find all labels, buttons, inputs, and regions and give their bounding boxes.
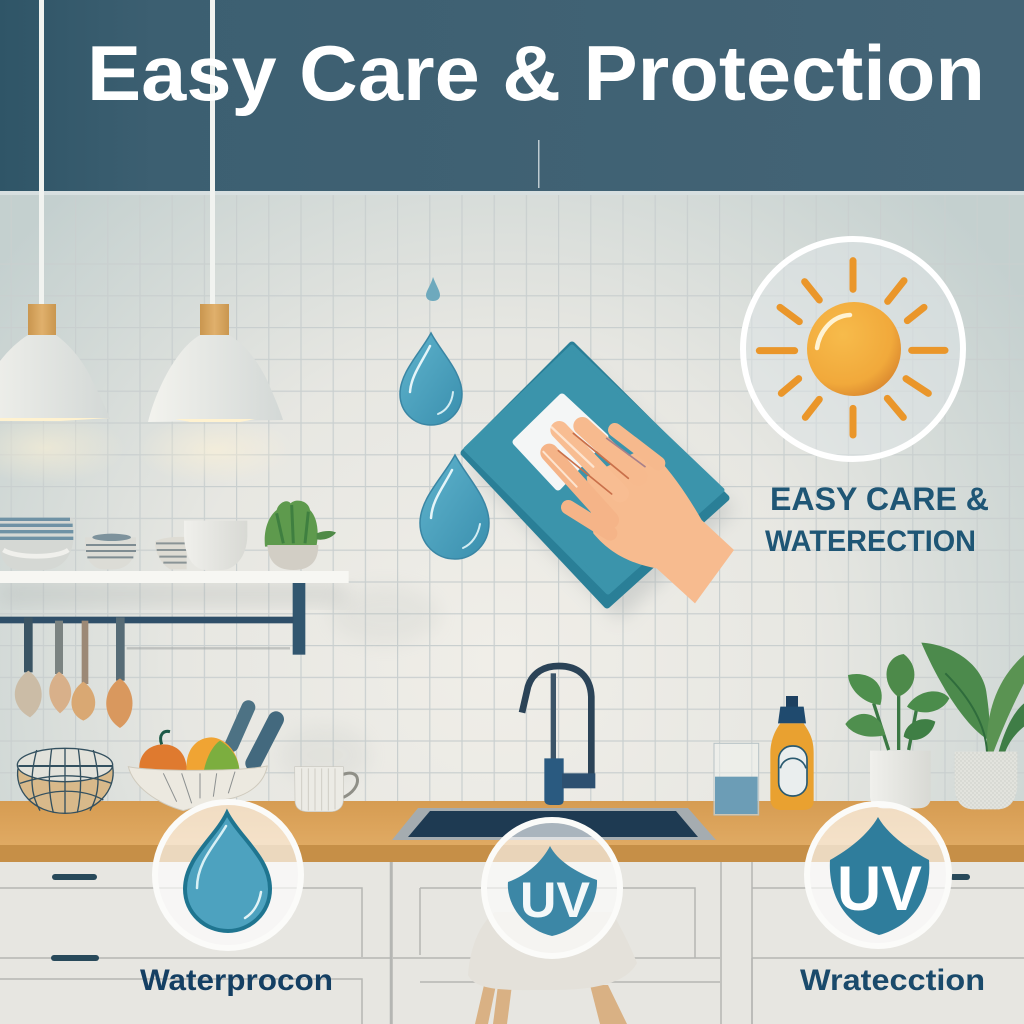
faucet bbox=[522, 666, 595, 805]
label: wratecction: Wratecction bbox=[800, 964, 985, 997]
drop icon bbox=[185, 813, 270, 931]
right pendant lamp bbox=[135, 0, 295, 484]
title band bbox=[0, 0, 1024, 195]
small water droplet bbox=[426, 277, 440, 301]
UV letters: UV bbox=[837, 854, 922, 924]
water drop upper bbox=[400, 333, 462, 425]
utensil rail bbox=[0, 617, 293, 623]
small plant bbox=[845, 654, 949, 750]
shelf bracket bbox=[293, 583, 305, 655]
patterned pot bbox=[955, 752, 1017, 809]
label: easy care: EASY CARE & bbox=[770, 481, 989, 517]
mug bbox=[295, 767, 358, 812]
glass of water bbox=[714, 743, 759, 815]
shelf plant bbox=[265, 501, 336, 570]
cabinets bbox=[0, 862, 1024, 1024]
cabinet handles bbox=[51, 874, 970, 961]
wiping cloth shadow bbox=[470, 360, 735, 620]
sponge bbox=[516, 397, 605, 487]
white cup bowl bbox=[184, 521, 247, 570]
hanging utensils bbox=[15, 617, 132, 728]
striped plates bbox=[155, 537, 187, 569]
shelf board bbox=[0, 571, 349, 583]
large plant bbox=[921, 643, 1024, 752]
chair bbox=[468, 912, 637, 1024]
knives bbox=[232, 707, 276, 763]
water drop lower bbox=[420, 455, 489, 559]
wire basket bbox=[17, 748, 113, 813]
badge: UV right bbox=[807, 804, 949, 946]
title: Easy Care & Protection bbox=[87, 29, 985, 117]
sink bbox=[392, 808, 716, 840]
fruit bbox=[139, 731, 239, 770]
detergent bottle bbox=[770, 696, 814, 810]
cleaning cloth bbox=[464, 345, 726, 605]
white pot bbox=[870, 751, 931, 808]
badge: UV centre bbox=[484, 820, 620, 956]
counter top bbox=[0, 801, 1024, 863]
hand bbox=[543, 426, 734, 603]
UV letters: UV bbox=[520, 872, 591, 928]
shelf with bowls and plant bbox=[0, 501, 358, 813]
label: waterprocon: Waterprocon bbox=[140, 964, 333, 997]
tiled wall bbox=[0, 190, 1024, 810]
fruit bowl bbox=[128, 766, 267, 811]
sun rays bbox=[759, 261, 945, 435]
badge: waterproof drop bbox=[155, 802, 301, 948]
sun disc bbox=[807, 302, 901, 396]
left pendant lamp bbox=[0, 0, 125, 484]
shield icon bbox=[830, 817, 929, 935]
label: waterection: WATERECTION bbox=[765, 525, 976, 558]
striped bowl stack bbox=[0, 518, 73, 570]
countertop items bbox=[714, 643, 1024, 815]
shield icon bbox=[508, 846, 597, 936]
sun badge bbox=[743, 239, 963, 459]
small striped bowl bbox=[85, 534, 136, 569]
